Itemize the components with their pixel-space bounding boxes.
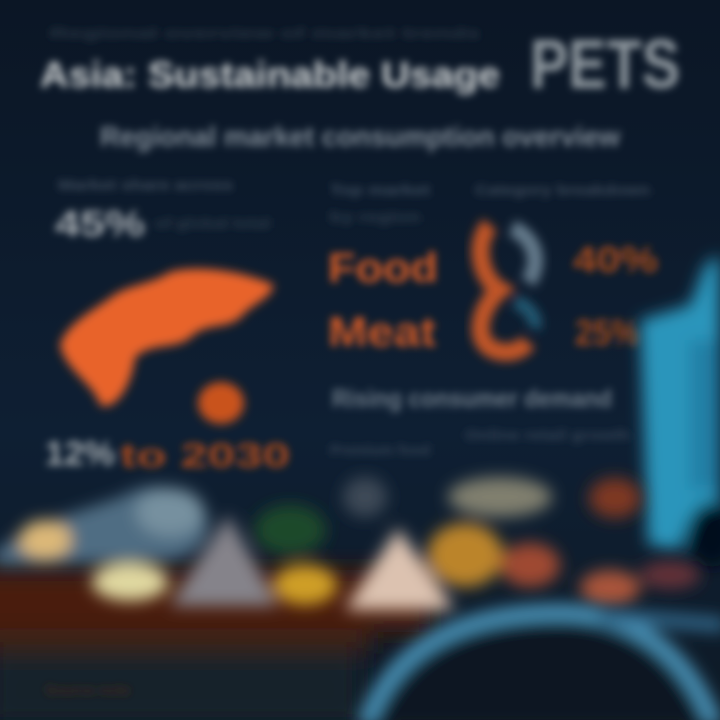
panel: right percentages: Category breakdown (475, 182, 650, 199)
panel: middle figures: by region (330, 209, 420, 226)
illustration: blue circular arc (365, 612, 720, 720)
title (40, 25, 680, 103)
subtitle: Regional market consumption overview (100, 121, 620, 152)
title: Regional overview of market trends (50, 25, 480, 41)
panel: middle figures: Meat (328, 308, 436, 355)
panel: left stat: of global total (155, 215, 270, 231)
text block: middle lower: Online retail growth (465, 427, 630, 444)
panel: right percentages (475, 182, 658, 353)
text block: middle lower: Premium food (330, 442, 430, 459)
chart: ring chart (481, 225, 535, 352)
panel: middle figures: Food (328, 244, 438, 291)
panel: left bottom stat: to 2030 (120, 437, 290, 475)
title: PETS (530, 25, 680, 103)
panel: middle figures (328, 182, 438, 355)
panel: right percentages: 25% (575, 312, 640, 353)
panel: left bottom stat (45, 435, 290, 475)
panel: right percentages: 40% (573, 239, 658, 280)
panel: left stat: 45% (55, 203, 145, 244)
illustration: food piles (0, 477, 700, 610)
icon: blue building (640, 255, 720, 567)
title: Asia: Sustainable Usage (40, 54, 500, 95)
panel: middle figures: Top market (330, 182, 430, 199)
illustration: ground band (0, 570, 430, 720)
panel: left stat (55, 177, 270, 244)
panel: left bottom stat: 12% (45, 435, 115, 473)
text block: middle lower: Rising consumer demand (332, 385, 612, 413)
text block: middle lower (330, 385, 630, 459)
footer note: Source note (45, 682, 130, 699)
panel: left stat: Market share across (58, 177, 233, 194)
chart: orange map of Asia (60, 269, 274, 424)
